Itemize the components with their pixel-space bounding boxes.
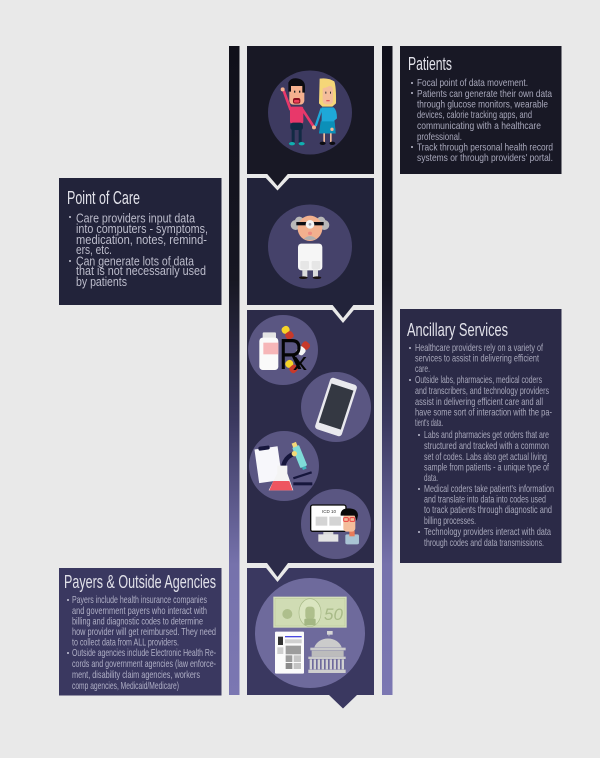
icon: doctor	[291, 216, 329, 279]
arrow: patients to point of care	[262, 172, 293, 190]
text block: payers bullets: ment, disability claim agencies, workers	[72, 669, 200, 681]
text block: point of care bullets: ers, etc.	[76, 243, 112, 257]
text block: ancillary bullets: care.	[415, 363, 430, 375]
icon: man and woman holding hands	[281, 78, 337, 145]
text block: ancillary sub-bullets: billing processes.	[424, 515, 476, 527]
icon: prescription medicine: x	[293, 349, 307, 376]
text block: payers bullets: to collect data from ALL providers.	[72, 636, 179, 648]
heading: ancillary services: Ancillary Services	[407, 320, 508, 340]
text block: ancillary bullets: tient's data.	[415, 417, 443, 429]
arrow: ancillary services to payers	[262, 561, 293, 582]
icon: payers circle	[255, 578, 365, 688]
arrow: point of care to ancillary services	[328, 303, 358, 323]
text block: payers bullets: and government payers who interact with	[72, 605, 207, 617]
text block: ancillary sub-bullets: and translate into data into codes used	[424, 494, 546, 506]
text block: patients bullets	[411, 77, 553, 164]
right timeline bar	[382, 46, 392, 695]
text block: point of care bullets: into computers - symptoms,	[76, 222, 208, 236]
text block: ancillary bullets: Healthcare providers rely on a variety of	[415, 342, 543, 354]
icon: money, record and capitol	[273, 597, 347, 674]
text block: point of care bullets: by patients	[76, 275, 127, 289]
icon: smartphone	[301, 372, 371, 442]
panel: patients text	[400, 46, 562, 174]
text block: payers bullets: Payers include health insurance companies	[72, 594, 207, 606]
icon: medical coder at computer: ICD 10	[322, 509, 337, 514]
heading: payers and outside agencies: Payers & Outside Agencies	[64, 572, 216, 592]
text block: payers bullets	[67, 594, 216, 692]
text block: patients bullets: communicating with a healthcare	[417, 120, 541, 132]
panel: ancillary services illustration	[247, 310, 374, 563]
text block: ancillary sub-bullets: through codes and data transmissions.	[424, 537, 544, 549]
text block: patients bullets: Track through personal health record	[417, 142, 553, 154]
panel: payers and outside agencies illustration	[247, 568, 374, 695]
panel: point of care illustration	[247, 178, 374, 305]
text block: patients bullets: through glucose monitors, wearable	[417, 98, 548, 110]
panel: ancillary services text	[400, 309, 562, 563]
text block: ancillary sub-bullets: structured and tracked with a common	[424, 440, 549, 452]
text block: ancillary sub-bullets: data.	[424, 472, 438, 484]
text block: payers bullets: how provider will get reimbursed. They need	[72, 626, 216, 638]
icon: prescription medicine	[248, 315, 318, 385]
panel: patients illustration	[247, 46, 374, 174]
panel: payers and outside agencies text	[59, 568, 222, 696]
text block: point of care bullets: that is not necessarily used	[76, 264, 206, 278]
heading: point of care: Point of Care	[67, 188, 140, 208]
text block: ancillary bullets	[409, 342, 552, 429]
label: banknote denomination: 50	[324, 605, 343, 624]
left timeline bar	[229, 46, 240, 695]
text block: patients bullets: devices, calorie tracking apps, and	[417, 109, 532, 121]
icon: Rx symbol: R	[279, 330, 303, 379]
text block: payers bullets: comp agencies, Medicaid/Medicare)	[72, 680, 179, 692]
icon: point of care circle	[268, 204, 352, 288]
text block: point of care bullets: Can generate lots of data	[76, 254, 194, 268]
icon: medical coder at computer	[301, 489, 371, 559]
text block: point of care bullets	[69, 212, 208, 289]
text block: ancillary sub-bullets	[418, 429, 554, 549]
text block: payers bullets: billing and diagnostic codes to determine	[72, 616, 203, 628]
text block: patients bullets: Focal point of data movement.	[417, 77, 528, 89]
text block: point of care bullets: medication, notes, remind-	[76, 233, 207, 247]
icon: lab equipment	[249, 431, 319, 501]
text block: payers bullets: Outside agencies include Electronic Health Re-	[72, 647, 216, 659]
text block: payers bullets: cords and government agencies (law enforce-	[72, 658, 216, 670]
arrow: payers end pointer	[329, 695, 357, 708]
icon: patients circle	[268, 70, 352, 154]
text block: point of care bullets: Care providers input data	[76, 212, 195, 226]
panel: point of care text	[59, 178, 222, 305]
text block: patients bullets: professional.	[417, 131, 462, 143]
text block: ancillary bullets: assist in delivering efficient care and all	[415, 396, 543, 408]
text block: patients bullets: systems or through providers' portal.	[417, 152, 553, 164]
text block: patients bullets: Patients can generate their own data	[417, 88, 552, 100]
heading: patients: Patients	[408, 54, 452, 74]
text block: ancillary bullets: services to assist in delivering efficient	[415, 352, 539, 364]
